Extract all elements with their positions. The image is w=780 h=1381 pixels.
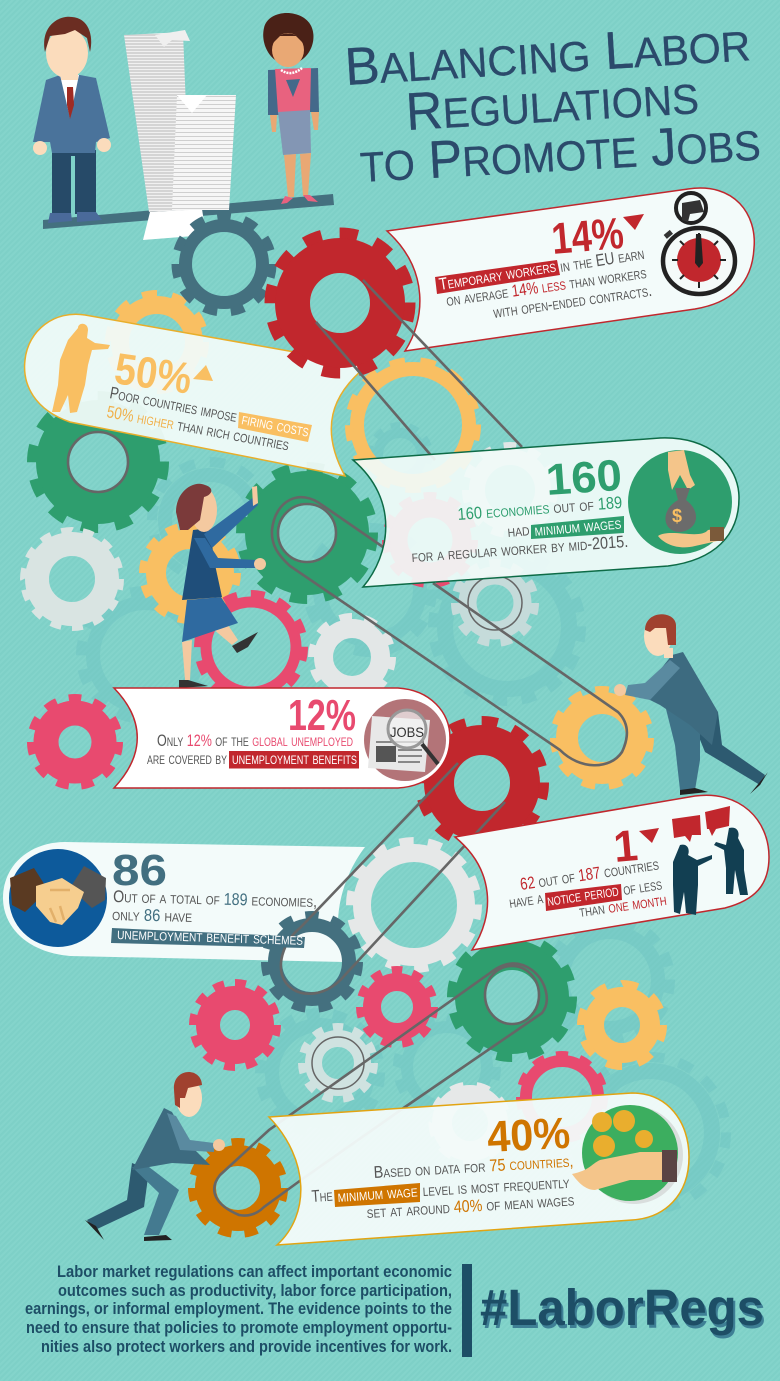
icon: arguing silhouettes with speech bubbles [672,806,748,915]
text: minimum wages: minimum wages [534,513,622,540]
hashtag: #LaborRegs [480,1279,764,1336]
text: regular worker: for a regular worker by mid-2015. [411,532,629,566]
gear: red top [270,233,410,373]
highlight: unemployment benefits [229,751,359,768]
text: footer paragraph: need to ensure that policies to promote employment opportu- [26,1319,452,1337]
gear: gear behind 160 panel [466,446,554,534]
gear: red middle [420,721,544,845]
figure: man pushing orange gear [85,1072,225,1241]
gear: pink behind 40 percent panel [519,1054,605,1140]
text: temporary workers: Temporary workers [438,257,557,294]
icon: pointing boss silhouette [52,324,110,413]
icon: up triangle [193,365,213,381]
panel: unemployment benefits coverage [114,688,450,788]
highlight: notice period [545,884,622,911]
panel: temporary workers backing [387,188,754,351]
highlight: minimum wages [531,516,624,539]
gear: dark teal top [176,216,272,312]
text: set at around: set at around 40% of mean wages [366,1190,575,1222]
figure: man pushing yellow gear [614,614,768,795]
panel: minimum wages [353,438,739,587]
text: poor countries: Poor countries impose [108,383,239,426]
icon: handshake [9,849,107,947]
stat: 160: 160 [544,451,624,505]
gear: pink lower left [193,983,277,1067]
gear: green lower [452,937,572,1057]
text: had: had [507,520,531,541]
highlight: minimum wage [334,1183,420,1207]
gear: light grey centre [312,617,392,697]
gear: light grey large [350,841,478,969]
title line 3: TO PROMOTE JOBS [358,113,762,194]
highlight: temporary workers [435,260,560,294]
panel: minimum wage level [269,1093,689,1245]
title line 2: REGULATIONS [404,66,700,142]
text: notice period: notice period [546,880,620,910]
text: only 86 have: only 86 have [112,905,192,926]
gear: grey right [455,563,535,643]
scale plank [43,194,334,229]
gear: pink left of 12 percent panel [31,698,119,786]
text: in the EU earn: in the EU earn [559,244,646,276]
text: only 12 percent: Only 12% of the global unemployed [157,731,353,750]
gear: pink under woman [198,594,304,700]
gear: yellow centre [349,361,477,489]
stat: 50 percent: 50% [112,344,195,404]
icon: money bag and hands: $ [672,506,682,526]
icon: paper stacks [124,30,236,240]
text: unemployment benefits: unemployment benefits [232,749,357,768]
panel: unemployment benefit schemes backing [3,842,365,962]
text: footer paragraph: nities also protect workers and provide incentives for work. [41,1338,452,1356]
panel: notice period [455,795,769,950]
text: open-ended contracts: with open-ended contracts. [492,281,653,322]
stat: 12 percent: 12% [288,691,356,740]
text: on average: on average 14% less than workers [445,263,648,310]
highlight: firing costs [238,412,312,442]
text: 160 economies: 160 economies out of 189 [457,493,623,524]
text: minimum wage: minimum wage [337,1181,418,1206]
icon: jobs newspaper and magnifier: JOBS [390,724,424,740]
gear: yellow behind woman [143,526,237,620]
text: unemployment benefit schemes: unemployment benefit schemes [117,924,303,949]
text: 62 out of 187: 62 out of 187 countries [519,854,660,894]
gear: green middle [241,467,373,599]
panel: temporary workers contents [435,193,735,322]
panel: firing costs [25,314,368,476]
text: footer paragraph: Labor market regulations can affect important economic [57,1263,452,1281]
text: of less: of less [622,874,663,899]
hashtag: #LaborRegs [482,1282,766,1339]
gear: light grey left [24,531,120,627]
stat: 14 percent: 14% [550,209,626,264]
gear: green left [32,396,164,528]
icon: down triangle [623,214,644,230]
text: the: The [311,1186,333,1206]
gears layer [24,216,663,1234]
icon: jobs newspaper and magnifier [364,699,446,781]
gear: grey lower [302,1027,374,1099]
stat: 1: 1 [612,821,640,872]
figure: man in suit [33,17,111,223]
icon: down triangle [639,828,659,843]
text: based on data: Based on data for 75 countries, [373,1152,574,1182]
gear: yellow lower right [581,984,663,1066]
gear: dark teal lower [265,915,359,1009]
gear: pink behind 160 panel [386,496,474,584]
text: footer paragraph: outcomes such as productivity, labor force participation, [58,1282,452,1300]
icon: coins over hand [572,1105,683,1204]
highlight: schemes [111,928,305,948]
gear: yellow under right man [554,690,650,786]
gear: pink lower centre [360,970,434,1044]
stat: 86: 86 [112,846,167,895]
text: are covered by: are covered by [147,749,227,768]
text: than one month: than one month [578,890,668,921]
stat: 40 percent: 40% [486,1109,571,1162]
gear: yellow behind firing cost panel [109,294,205,390]
belts: middle loop and bottom loop [68,432,627,1216]
text: 50 percent higher: 50% higher than rich countries [105,402,291,454]
text: footer paragraph [25,1263,452,1356]
icon: stopwatch [663,193,735,294]
text: out of a total: Out of a total of 189 economies, [113,887,317,911]
figure: woman pushing gear [176,484,266,688]
text: have a: have a [508,888,544,912]
panel: unemployment benefit schemes contents [9,846,317,949]
faint background gears [81,425,726,1209]
belt: red gear to teal gear [281,763,505,994]
gear: orange bottom [192,1142,284,1234]
icon: money bag and hands [628,450,732,554]
text: footer paragraph: earnings, or informal employment. The evidence points to the [25,1300,452,1318]
gear: light grey behind 40 percent panel [432,1085,508,1161]
title line 1: BALANCING LABOR [343,13,752,97]
text: firing costs: firing costs [240,409,311,441]
belt: top lines from red gear [316,280,522,460]
text: level is most frequently: level is most frequently [422,1173,570,1200]
figure: woman with pearl necklace [263,13,319,204]
divider bar [462,1264,472,1357]
title [343,13,762,194]
